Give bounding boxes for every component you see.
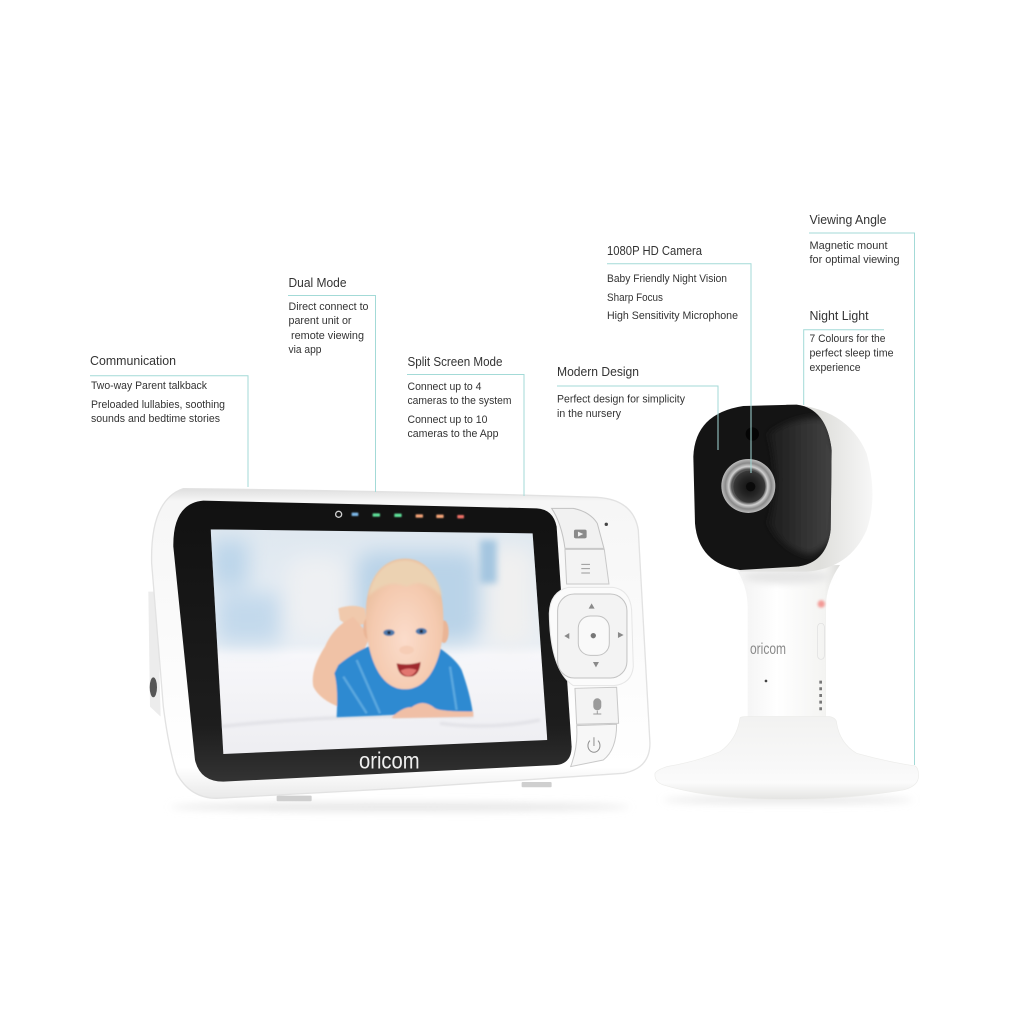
speaker holes bbox=[817, 681, 825, 712]
side switch bbox=[818, 623, 824, 659]
callout: 1080P HD camera bbox=[607, 243, 751, 473]
camera base bbox=[655, 717, 918, 799]
description: Preloaded lullabies, soothing bbox=[91, 399, 225, 411]
status LEDs bbox=[352, 513, 464, 518]
description: sounds and bedtime stories bbox=[91, 413, 220, 425]
night vision sensor bbox=[746, 427, 759, 441]
baby nose bbox=[399, 646, 414, 654]
nursery camera unit bbox=[655, 404, 918, 799]
lens pupil bbox=[746, 482, 755, 491]
shirt highlights bbox=[343, 660, 457, 713]
description: Sharp Focus bbox=[607, 292, 663, 304]
camera microphone dot bbox=[765, 680, 767, 682]
icon: microphone bbox=[593, 698, 601, 714]
baby bbox=[313, 559, 473, 718]
monitor shadow bbox=[170, 803, 630, 811]
connector line bbox=[557, 386, 718, 450]
monitor black bezel bbox=[173, 501, 572, 782]
callout: modern design bbox=[557, 364, 718, 450]
camera neck bbox=[735, 565, 840, 720]
connector line bbox=[288, 296, 376, 492]
blue pillow edge bbox=[480, 540, 497, 583]
monitor bottom buttons bbox=[277, 782, 552, 801]
icon: play bbox=[574, 530, 587, 538]
screen photo: baby bbox=[207, 527, 553, 760]
parent monitor unit bbox=[148, 489, 650, 801]
description: remote viewing bbox=[291, 330, 364, 342]
connector line bbox=[407, 374, 524, 496]
callout: split screen mode bbox=[407, 354, 524, 496]
description: experience bbox=[810, 362, 860, 374]
raised foot bbox=[338, 606, 367, 625]
icon: power bbox=[588, 737, 600, 752]
monitor body bbox=[152, 489, 650, 798]
description: parent unit or bbox=[288, 315, 352, 327]
headphone jack bbox=[150, 677, 157, 697]
playback button bbox=[552, 508, 604, 548]
scalp highlight bbox=[368, 560, 442, 597]
heading: Split Screen Mode bbox=[408, 354, 502, 369]
menu button bbox=[565, 549, 609, 584]
description: cameras to the system bbox=[408, 395, 512, 407]
monitor side port strip bbox=[148, 592, 161, 717]
d-pad bbox=[549, 587, 633, 686]
camera shadow bbox=[663, 797, 913, 803]
description bbox=[288, 301, 368, 356]
connector line bbox=[809, 233, 914, 765]
description bbox=[91, 380, 225, 425]
callout: dual mode bbox=[288, 275, 376, 492]
description: for optimal viewing bbox=[810, 254, 900, 266]
d-pad centre dot bbox=[591, 633, 596, 638]
d-pad centre button bbox=[578, 616, 609, 655]
description: Connect up to 10 bbox=[408, 414, 488, 426]
screen background bbox=[207, 527, 553, 760]
heading: Night Light bbox=[810, 308, 869, 323]
description: Two-way Parent talkback bbox=[91, 380, 207, 392]
baby hands bbox=[392, 703, 473, 718]
baby eyes bbox=[383, 628, 427, 636]
description bbox=[557, 394, 685, 420]
power button bbox=[571, 724, 617, 767]
description: in the nursery bbox=[557, 408, 621, 420]
connector line bbox=[804, 330, 884, 405]
status light bbox=[818, 600, 825, 608]
description bbox=[810, 333, 894, 374]
heading: Modern Design bbox=[557, 364, 639, 379]
description bbox=[607, 273, 738, 322]
camera head back shell bbox=[723, 404, 872, 572]
description bbox=[810, 240, 900, 266]
play triangle bbox=[578, 532, 583, 537]
connector line bbox=[607, 264, 751, 473]
description: Connect up to 4 bbox=[408, 381, 482, 393]
talkback button bbox=[575, 687, 619, 724]
description: Direct connect to bbox=[288, 301, 368, 313]
microphone pinhole bbox=[605, 523, 608, 526]
description: Baby Friendly Night Vision bbox=[607, 273, 727, 285]
baby ears bbox=[362, 620, 368, 638]
callout: viewing angle bbox=[809, 212, 914, 765]
oricom logo on monitor: oricom bbox=[359, 748, 420, 774]
baby head bbox=[366, 559, 443, 689]
callout: night light bbox=[804, 308, 894, 405]
heading: Dual Mode bbox=[288, 275, 346, 290]
baby teeth and tongue bbox=[401, 668, 417, 676]
description: via app bbox=[288, 344, 322, 356]
description: High Sensitivity Microphone bbox=[607, 310, 738, 322]
glass reflection bbox=[772, 416, 832, 556]
baby leg and arm bbox=[313, 617, 370, 707]
camera lens bbox=[721, 459, 775, 513]
baby mouth bbox=[397, 662, 421, 677]
blurred nursery background bbox=[212, 540, 533, 647]
d-pad arrows bbox=[564, 603, 624, 667]
description: Perfect design for simplicity bbox=[557, 394, 685, 406]
heading: Communication bbox=[90, 353, 176, 368]
heading: 1080P HD Camera bbox=[607, 243, 703, 258]
bed sheet folds bbox=[220, 716, 540, 727]
camera black face bbox=[693, 405, 832, 570]
callout: communication bbox=[90, 353, 248, 487]
blue shirt bbox=[334, 645, 473, 717]
description: 7 Colours for the bbox=[810, 333, 886, 345]
oricom logo on camera: oricom bbox=[750, 641, 786, 658]
icon: menu bbox=[581, 564, 590, 573]
icon: night mode bbox=[336, 511, 342, 517]
description: perfect sleep time bbox=[810, 348, 894, 360]
heading: Viewing Angle bbox=[810, 212, 886, 227]
description: Magnetic mount bbox=[810, 240, 888, 252]
description bbox=[408, 381, 512, 440]
connector line bbox=[90, 376, 248, 487]
infographic canvas bbox=[90, 214, 919, 813]
neck shade under head bbox=[743, 569, 830, 584]
description: cameras to the App bbox=[408, 428, 498, 440]
